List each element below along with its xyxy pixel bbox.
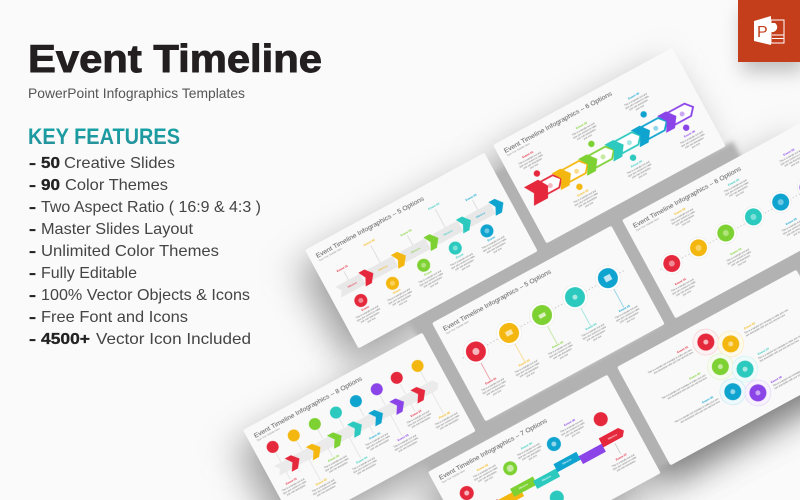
event 06: type your content to make [681,133,706,148]
event 05 [341,387,396,453]
event 04: your own description [521,448,542,461]
panel: slide 7 options: Event Timeline Infographics – 7 Options [438,417,549,482]
event 05 [457,190,511,258]
panel: slide 6 options chevrons: Event Timeline Infographics – 6 Options [503,90,614,155]
event 06: Event 06 [683,129,696,139]
event 03: This is a sample text and [572,122,596,137]
event 03: Event 03 [551,340,564,349]
ribbon bars: Milestone [518,483,529,490]
event 02 [470,459,502,487]
event 04: type your content to make [518,444,543,460]
event 02: your icon [484,475,494,483]
event 05: Event 05 [627,91,640,101]
event 05: This is a sample text and [624,92,648,107]
event 04: Event 04 [757,346,770,356]
gaps between slides [412,151,800,468]
event 05: type your content to make [625,95,650,110]
event 04: your icon [461,264,471,271]
event 04: type your content to make [582,325,608,341]
event 04: type your content to make [725,181,750,196]
event 04: Event 04 [520,441,533,451]
title: Event Timeline [28,38,322,81]
event 01: This is a sample text and [481,377,505,392]
event 05: your own description [629,98,649,112]
event 04: Event 04 [727,177,740,187]
gray band [274,378,441,476]
event 02: This is a sample text and [670,208,695,223]
slide shadows [235,66,800,500]
event 03: Event 03 [729,247,742,256]
event 06: your own description [565,425,585,438]
arrow band: Milestone [443,229,454,237]
connector line [660,181,800,270]
event 05: type your content to make [366,434,391,450]
event 04: Event 04 [355,455,368,465]
event 08: your own description [439,418,460,431]
event 02: This is a sample text and [387,287,411,303]
event 01: This is a sample text and [282,477,306,493]
event 03: your icon [583,133,593,141]
key features list: Unlimited Color Themes [41,243,219,260]
key features list [29,155,261,348]
event 07: This is a sample text and [612,453,636,468]
event 02: your icon [682,219,692,227]
event 03: This is a sample text and [548,341,572,356]
event 02 [491,316,544,382]
event 06 [362,375,425,454]
event 03: your icon [430,281,440,289]
event 03: your own description [576,128,597,141]
event 07: type your content to make [612,456,638,471]
event 06 [776,144,800,203]
panel: slide 5 options circles [432,226,665,421]
event 02: your own description [392,294,412,307]
event 02: This is a sample text and [573,189,597,204]
connector line [462,270,625,358]
event 02 [357,234,416,311]
event 06 [770,357,800,390]
event 07 [382,363,438,430]
event 01: type your content to make [356,307,382,323]
event 01: This is a sample text and [518,151,542,166]
event 06 [557,414,589,442]
event 02: This is a sample text and [312,478,336,493]
event 04: your own description [357,463,377,476]
event 02: Event 02 [363,238,376,247]
event 05: Event 05 [465,193,478,202]
event 02: Event 02 [518,358,531,368]
panel: slide 6 options chevrons: Type Your Subtitle Here [506,141,531,157]
event 01 [515,146,552,182]
event 02: type your content to make [474,466,499,482]
key features list: Master Slides Layout [41,221,194,238]
event 05: Event 05 [785,217,798,226]
event 04: This is a sample text and [724,178,748,194]
key features list: - [29,287,36,304]
event 07 [586,406,639,474]
event 07: your own description [616,460,637,473]
event 06: your own description [398,440,419,453]
event 03 [524,298,577,364]
event 06: type your content to make [394,436,420,452]
event 03: type your content to make [325,457,350,472]
event 04: Event 04 [585,322,598,331]
panel: slide 6 options wave [622,123,800,318]
event 02: type your content to make [574,192,599,207]
key features list: - [29,331,36,348]
event 04: This is a sample text and [450,252,474,267]
event 01: type your content to make [672,280,697,296]
arrow band: Milestone [411,247,422,254]
event 03: your own description [423,276,444,289]
event 06: This is a sample text and [393,434,418,449]
event 01: your icon [492,389,503,396]
event 08: This is a sample text and [435,411,459,426]
key features list: - [29,199,36,216]
event 02: type your content to make [313,481,338,496]
arrow band: Milestone [378,264,389,272]
event 06: your icon [790,160,800,168]
event 04: your own description [631,166,652,179]
panel: slide 8 options [243,333,476,500]
event 05: your icon [626,316,636,324]
event 06: your icon [691,142,701,149]
event 03: type your content to make [727,250,752,266]
event 05: Event [487,235,496,242]
event 02: Event 02 [743,321,756,331]
connectors [338,191,478,280]
event 02: This is a sample text and [473,464,497,479]
event 04: your own description [586,329,607,342]
panel: slide 5 options arrows: Event Timeline Infographics – 5 Options [315,195,426,260]
ribbon bars [472,426,629,500]
event 05: Event 05 [701,395,714,404]
event 01: Event 01 [676,345,689,354]
event 03 [393,224,447,293]
event 06: Event 06 [563,418,576,427]
event 04: your icon [528,454,538,461]
event 05: own description with your icon and text here [680,400,721,424]
event 02: Event 02 [673,206,687,216]
event 05: Event 05 [368,431,381,441]
ribbon bars: Milestone [608,433,619,441]
event 02: own description with your icon and text here [745,313,787,338]
event 04 [620,148,656,183]
event 07: Event 07 [615,452,628,462]
arrow band [335,196,507,299]
event 04: Event 04 [630,159,643,169]
event 05: your icon [635,104,646,111]
event 06 [673,118,709,153]
event 06: your icon [571,430,581,438]
key features list: - [29,155,36,172]
event 01: type your content to make [482,380,507,395]
panel: slide 6 options wave: Event Timeline Infographics – 6 Options [632,165,743,230]
key features list: 90 [41,177,60,194]
event 05: This is a sample text message to make your own [674,397,720,424]
event 04: your icon [735,190,745,198]
event 01 [331,260,385,328]
event 02 [741,304,791,338]
panel: slide hexagon rings [617,270,800,465]
event 05 [672,393,721,427]
event 04: Event [455,252,464,260]
chevron band [524,98,698,206]
event 05: This is a sample text and [481,235,506,250]
event 03 [659,369,708,403]
event 01 [645,344,695,377]
event 02: Event 02 [476,463,489,472]
event 07: your own description [411,416,432,429]
key features list: 100% Vector Objects & Icons [41,287,250,304]
panel: slide 7 options: Type Your Subtitle Here [441,468,466,484]
event 08: type your content to make [436,414,461,429]
event 02: your own description [578,196,598,209]
event 04: your icon [593,335,603,342]
icon: PowerPoint badge: P [757,24,768,41]
event 01: your own description [523,157,543,170]
event 01: your own description [486,384,506,397]
key features list: Two Aspect Ratio ( 16:9 & 4:3 ) [41,199,261,216]
event 02: your own description [477,470,498,483]
event 07: type your content to make [407,412,433,428]
event 01 [457,484,476,500]
key features list: Creative Slides [64,155,175,172]
connectors [275,371,443,493]
event 04 [557,280,610,346]
panel: slide 6 options wave: Type Your Subtitle Here [635,216,660,232]
event 04 [321,399,382,477]
badge shadow [742,10,800,72]
event 03: Event 03 [327,453,340,463]
arrow band: Milestone [347,281,358,289]
event 05: your own description [486,241,507,254]
event 01: type your content to make [283,480,308,495]
event 01: your own description [286,484,307,497]
event 04: type your content to make [353,459,378,474]
event 04 [514,437,571,500]
event 01: your own description [360,311,381,324]
event 02: your own description [675,214,695,227]
icon: PowerPoint badge [738,0,800,62]
event 01: This is a sample text and [355,305,380,320]
event 06: Event 06 [770,375,783,384]
event 04: your own description [455,259,475,272]
event 01: your icon [682,290,692,297]
event 04: This is a sample text and [352,456,376,471]
event 06: Event 06 [782,147,796,157]
subtitle: PowerPoint Infographics Templates [28,85,245,101]
event 03: your own description [553,347,573,360]
panel: slide 5 options circles: Type Your Subtitle Here [445,319,470,335]
event 03: your own description [731,254,751,267]
event 04: your own description [729,185,749,198]
event 02: your own description [519,365,540,378]
event 01 [457,334,510,400]
event 03 [501,459,520,478]
event 01: your icon [367,316,377,324]
event 05: This is a sample text and [365,432,389,447]
event 01: own description with your icon and text here [653,351,695,375]
key features list: Vector Icon Included [96,331,251,348]
event 03: your icon [737,259,748,267]
panel: slide 8 options: Type Your Subtitle Here [256,426,281,442]
event 07: Event 07 [410,409,423,418]
key features heading: KEY FEATURES [28,124,180,149]
event 01: This is a sample text message to make your own [647,348,693,375]
event 03: Event 03 [400,228,413,237]
panel: slide 5 options circles: Event Timeline Infographics – 5 Options [442,268,553,333]
key features list: 4500+ [41,331,90,348]
event 01: This is a sample text and [671,278,695,293]
event 03: type your content to make [573,124,598,140]
event 05: type your content to make [482,237,508,253]
event 08 [403,354,462,432]
panel: slide 8 options: Event Timeline Infographics – 8 Options [253,375,364,440]
event 03: your own description [328,461,349,474]
event 02: your own description [316,484,337,498]
key features list: - [29,221,36,238]
event 03: This is a sample text and [324,454,348,470]
event 05: type your content to make [616,307,641,323]
event 05: This is a sample text and [615,305,639,320]
event 02 [566,177,602,212]
event 05 [590,260,644,328]
event 04: Event 04 [427,201,440,211]
event 04: This is a sample text and [581,323,606,338]
event 02: Event [392,287,401,295]
event 02: Event 02 [315,477,328,487]
event 02: your icon [584,201,595,208]
event 02 [281,422,341,499]
ribbon bars: Milestone [562,458,573,466]
event 03 [569,117,605,153]
event 07: This is a sample text and [406,410,431,425]
key features list: - [29,309,36,326]
event 02: type your content to make [671,210,696,226]
key features list: - [29,177,36,194]
event 03: This is a sample text message to make your own [661,374,707,400]
panel: slide 5 options arrows: Type Your Subtitle Here [318,246,343,262]
event 02: your icon [526,371,536,378]
event 05: your own description [370,438,390,451]
event 02 [667,203,717,263]
event 01: Event 01 [521,150,534,159]
event 03: own description with your icon and text here [667,376,708,400]
event 04: This is a sample text and [627,160,651,175]
event 03: type your content to make [419,272,444,287]
panel: slide 7 options [428,375,661,500]
event 01: type your content to make [519,153,544,169]
key features list: 50 [41,155,60,172]
key features list: Free Font and Icons [41,309,188,326]
event 06: This is a sample text and [680,130,704,145]
event 04: own description with your icon and text here [759,339,800,363]
event 02: type your content to make [515,361,541,377]
arrow band: Milestone [476,211,487,219]
event 05 [544,435,563,454]
event 05: Event 05 [618,304,631,313]
event 01: Event 01 [336,264,349,273]
event 03: This is a sample text and [726,248,750,263]
panel: slide 6 options chevrons [493,48,726,243]
event 02: your icon [398,299,409,307]
event 05: your icon [493,247,503,254]
event 03: Event 03 [688,371,701,381]
event 02: This is a sample text and [514,359,539,374]
event 01: Event [361,305,370,312]
event 02: Event 02 [576,188,589,198]
event 06: This is a sample text and [560,419,584,434]
event 03 [709,217,755,271]
event 04: type your content to make [451,255,476,270]
event 04: your icon [638,172,648,179]
event 08: Event 08 [438,410,451,420]
event 03: your icon [559,353,569,360]
key features list: - [29,243,36,260]
event 05 [764,186,800,241]
event 06: type your content to make [561,421,586,437]
event 02: type your content to make [388,290,413,305]
event 01: Event 01 [285,476,298,486]
event 05 [621,88,657,124]
event 02: This is a sample text message to make your own [744,308,790,335]
event 03: Event 03 [575,121,588,130]
event 03: Event [423,269,432,277]
ribbon bars: Milestone [541,475,552,482]
key features list: - [29,265,36,282]
event 04: type your content to make [628,162,653,178]
event 01: your icon [529,163,540,170]
event 01 [258,433,313,498]
event 04: This is a sample text and [517,442,541,457]
event 04 [420,198,479,275]
event 04 [721,174,770,233]
event 05: your own description [619,311,640,324]
event 03: type your content to make [549,343,574,359]
event 06: your own description [685,136,705,149]
event 01: Event 01 [484,376,497,386]
ring cluster [688,314,776,421]
key features list: Fully Editable [41,265,137,282]
event 03: This is a sample text and [418,269,443,284]
event 01: your own description [675,284,696,297]
event 01 [654,248,700,301]
panel: slide 5 options arrows [305,153,538,348]
key features list: Color Themes [65,177,168,194]
event 06: Event 06 [397,433,410,442]
event 03 [300,410,355,475]
event 01: Event 01 [674,277,687,286]
